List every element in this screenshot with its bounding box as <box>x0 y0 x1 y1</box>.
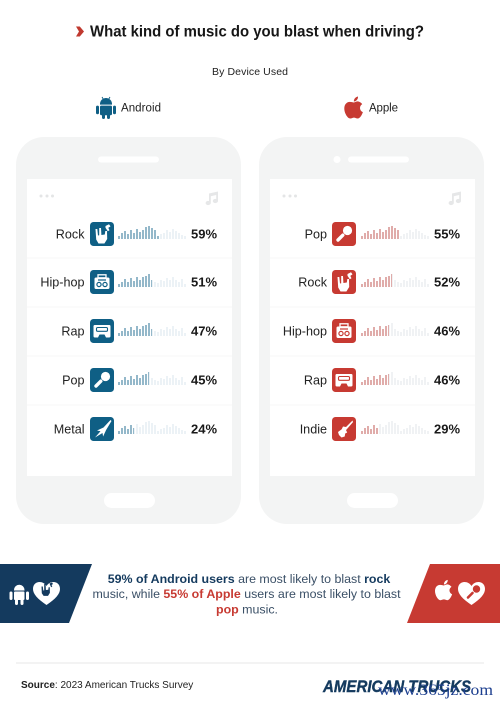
phone home button <box>104 493 155 508</box>
phone screen <box>27 179 232 476</box>
phone speaker <box>348 156 409 162</box>
icon: title chevron <box>76 26 84 36</box>
phone body <box>16 137 241 524</box>
status dots <box>40 194 54 198</box>
row: Pop 45%: Pop <box>62 374 84 388</box>
callout banner <box>0 564 500 623</box>
icon: heart with rock hand <box>33 582 60 605</box>
row: Metal 24%: 24% <box>191 422 217 436</box>
right red tab <box>407 564 500 623</box>
row: Hip-hop 46%: Hip-hop <box>283 324 327 338</box>
source: Source: 2023 American Trucks Survey <box>21 680 193 691</box>
icon: heart with mic <box>458 582 485 605</box>
phone body <box>259 137 484 524</box>
status dots <box>282 194 297 198</box>
panel: android phone <box>16 137 241 524</box>
row: Rap 46%: Rap <box>304 374 327 388</box>
row: Metal 24% <box>54 417 217 441</box>
row: Rock 52% <box>298 270 460 294</box>
watermark: www.365jz.com <box>378 682 494 699</box>
phone camera <box>334 156 340 163</box>
row: Indie 29%: Indie <box>300 422 327 436</box>
row: Rock 59%: Rock <box>56 228 85 242</box>
row: Rock 59%: 59% <box>191 226 217 242</box>
phone speaker <box>98 156 159 162</box>
left navy tab <box>0 564 92 623</box>
callout text: music, while 55% of Apple users are most likely to blast <box>92 587 401 601</box>
footer <box>16 663 494 699</box>
callout text: pop music. <box>216 602 278 616</box>
row: Rock 52%: Rock <box>298 276 328 290</box>
phone screen <box>270 179 475 476</box>
subtitle: By Device Used <box>212 66 288 78</box>
row: Pop 45%: 45% <box>191 372 217 388</box>
apple header: Apple <box>369 102 398 114</box>
row: Hip-hop 51%: 51% <box>191 274 217 290</box>
icon: music note <box>449 192 461 205</box>
android header <box>96 97 161 119</box>
row: Rock 52%: 52% <box>434 274 460 290</box>
apple header <box>344 96 398 118</box>
panel: apple phone <box>259 137 484 524</box>
row: Indie 29%: 29% <box>434 422 460 436</box>
icon: apple white <box>435 580 452 600</box>
icon: music note <box>206 192 218 205</box>
icon: apple <box>344 96 363 118</box>
row: Hip-hop 46% <box>283 319 460 343</box>
row: Indie 29% <box>300 417 460 441</box>
row: Rap 47%: Rap <box>61 324 84 338</box>
row: Hip-hop 46%: 46% <box>434 324 460 338</box>
row: Rap 46%: 46% <box>434 372 460 388</box>
row: Pop 45% <box>62 368 217 392</box>
row: Pop 55%: Pop <box>305 228 327 242</box>
row: Hip-hop 51% <box>40 270 217 294</box>
icon: android white <box>10 585 29 605</box>
row: Metal 24%: Metal <box>54 422 84 436</box>
android header: Android <box>121 102 161 114</box>
phone home button <box>347 493 398 508</box>
row: Rock 59% <box>56 222 217 246</box>
logo: AMERICAN TRUCKS <box>322 678 471 696</box>
row: Hip-hop 51%: Hip-hop <box>40 276 84 290</box>
row: Rap 47% <box>61 319 217 343</box>
title: What kind of music do you blast when driving? <box>90 24 424 40</box>
row: Rap 46% <box>304 368 460 392</box>
icon: android <box>96 97 116 119</box>
callout text: 59% of Android users are most likely to blast rock <box>108 572 390 586</box>
row: Rap 47%: 47% <box>191 324 217 338</box>
callout text <box>92 572 401 616</box>
row: Pop 55%: 55% <box>434 226 460 242</box>
row: Pop 55% <box>305 222 460 246</box>
